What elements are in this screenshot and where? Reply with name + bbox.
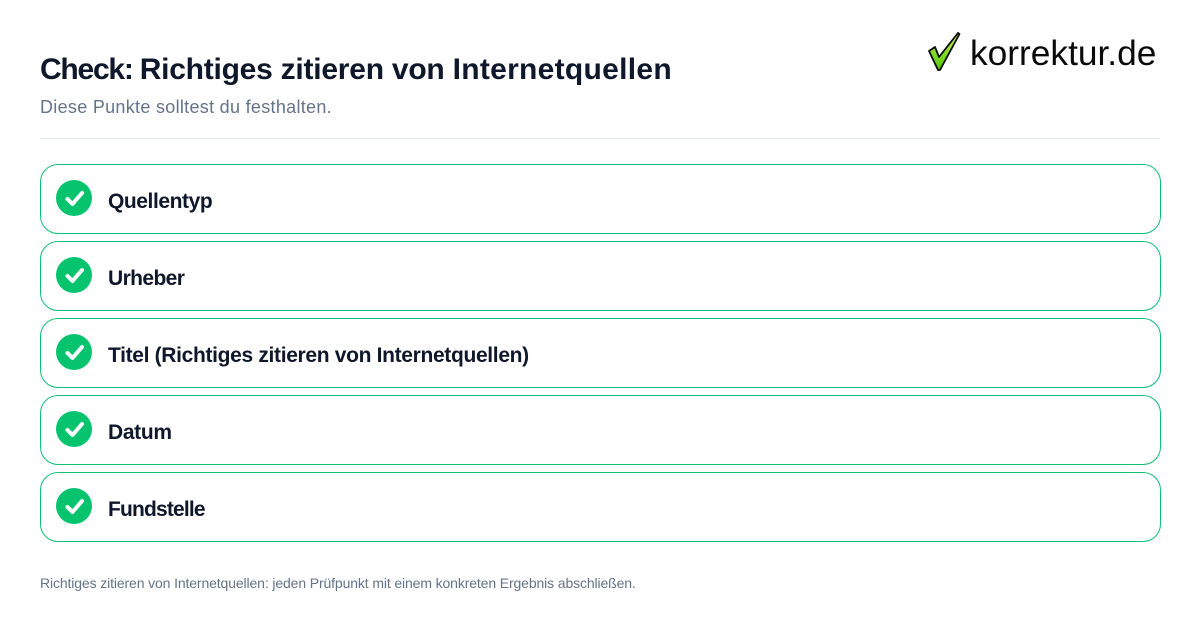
checklist item: Fundstelle [40,472,1161,542]
title: Check: Richtiges zitieren von Internetquellen [40,53,672,86]
checklist item: Urheber [40,241,1161,311]
checklist item: Titel: Titel (Richtiges zitieren von Internetquellen) [108,344,529,367]
checklist item: Titel [40,318,1161,388]
checklist item: Quellentyp [40,164,1161,234]
checklist item: Datum [40,395,1161,465]
logo: korrektur.de: korrektur.de [970,34,1156,73]
checklist item: Urheber: Urheber [108,267,184,290]
checklist item: Fundstelle: Fundstelle [108,498,205,521]
checklist item: Quellentyp: Quellentyp [108,190,212,213]
footer note: Richtiges zitieren von Internetquellen: jeden Prüfpunkt mit einem konkreten Ergebnis abschließen. [40,575,636,591]
checklist item: Datum: Datum [108,421,172,444]
subtitle: Diese Punkte solltest du festhalten. [40,97,332,117]
divider [40,138,1160,139]
